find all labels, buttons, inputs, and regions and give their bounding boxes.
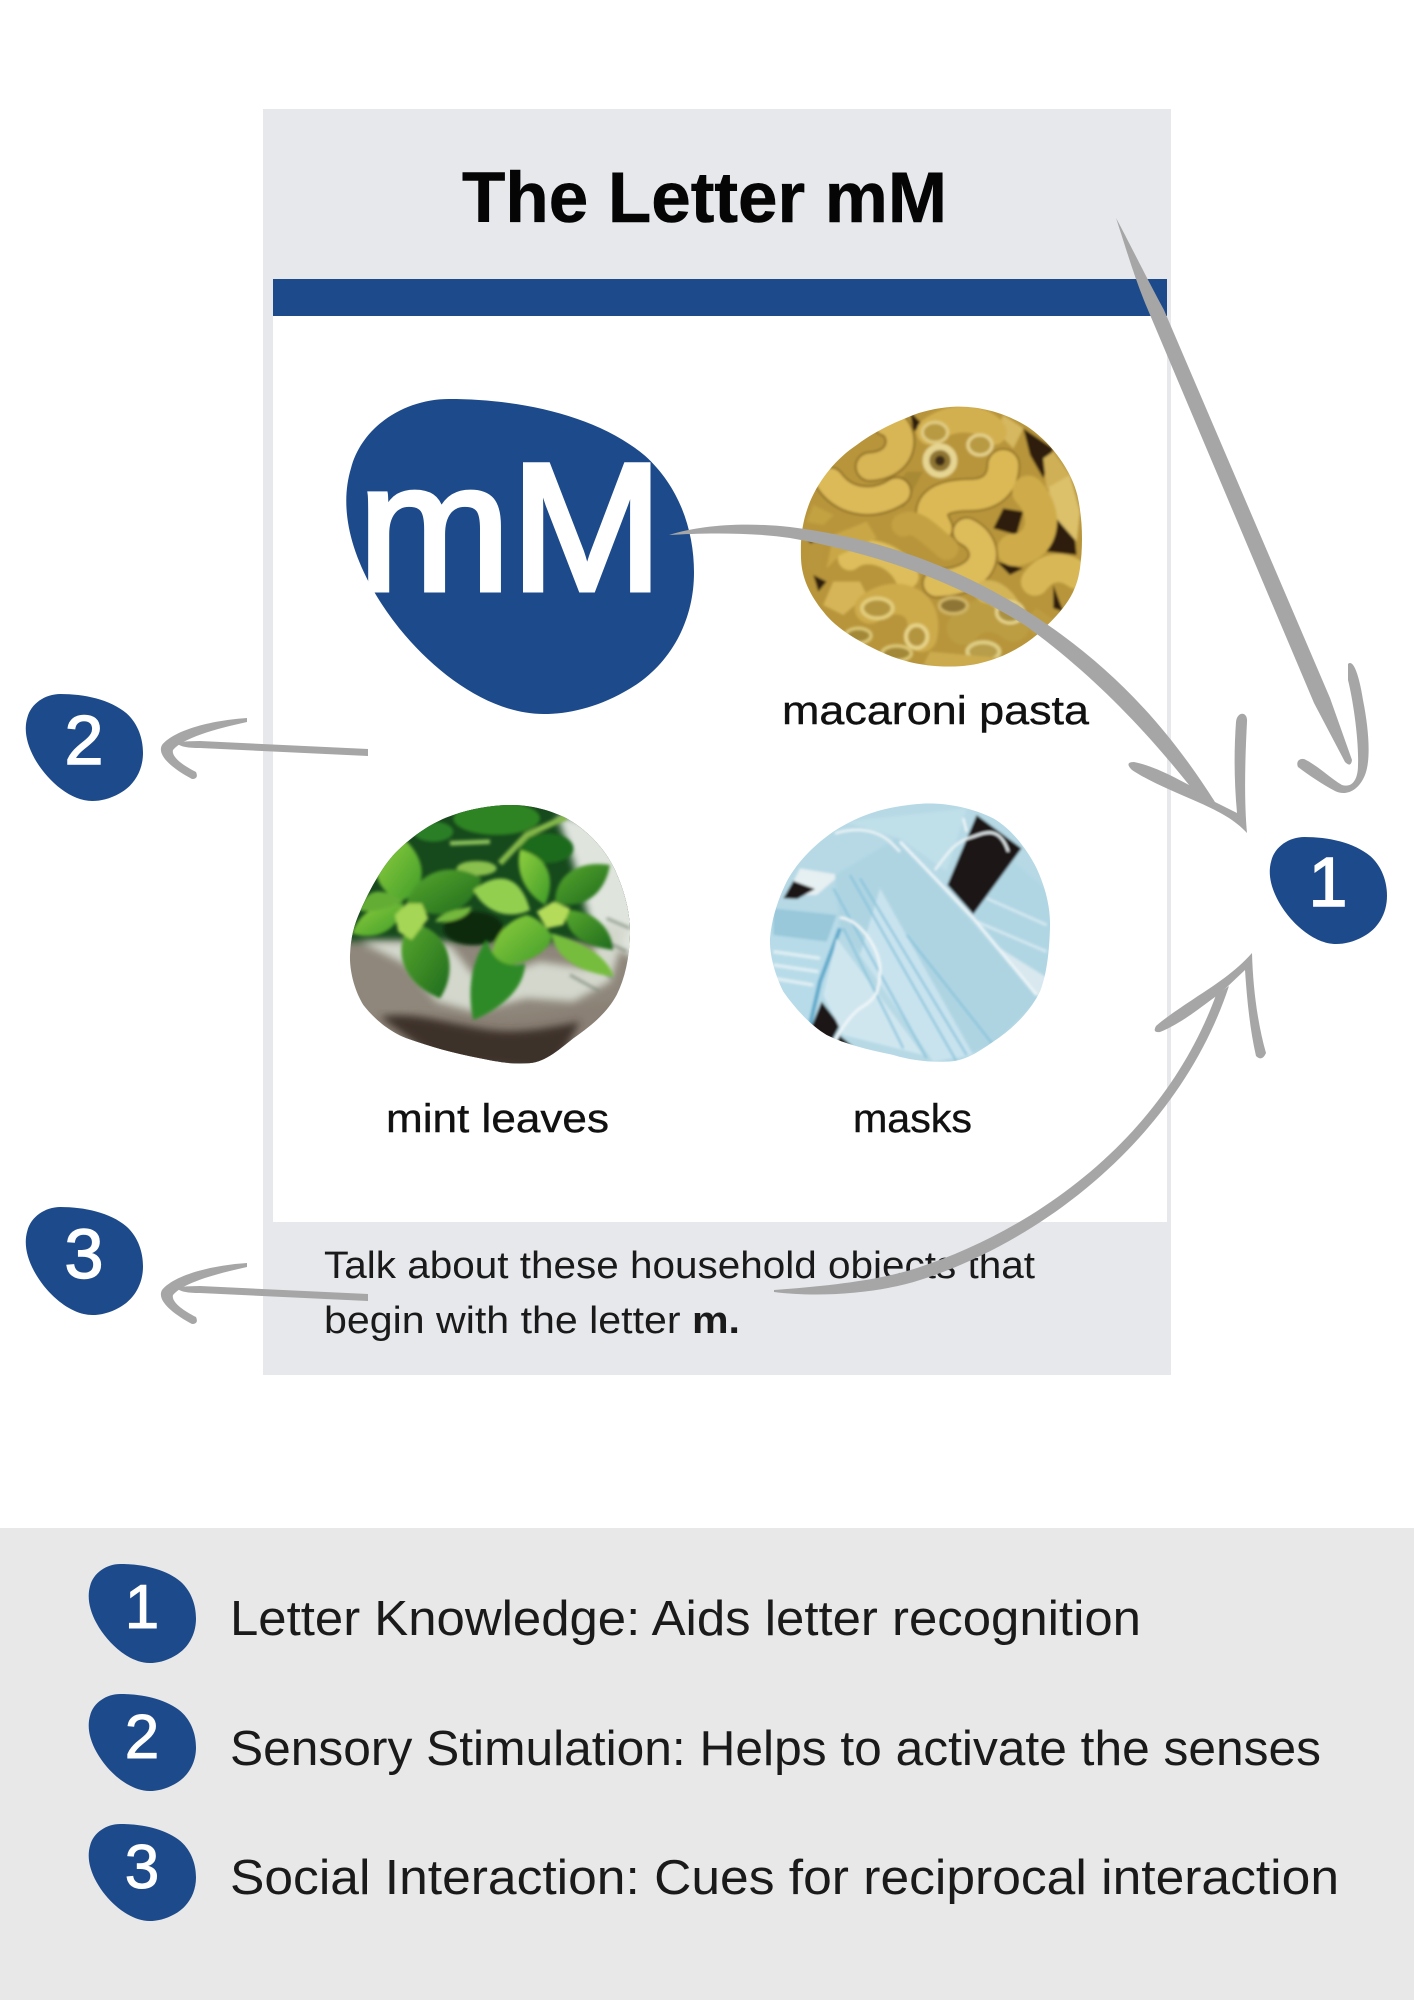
arrow: title to badge 1: [1116, 218, 1369, 793]
badge 2: 2: [65, 701, 103, 779]
legend item 3: [89, 1824, 1339, 1921]
legend item 2: 2: [125, 1703, 159, 1772]
photo: macaroni pasta: [800, 406, 1082, 667]
badge 2: [26, 694, 143, 801]
photo: mint leaves: [350, 805, 630, 1064]
header bar: [273, 279, 1167, 316]
photo: masks: [770, 804, 1050, 1062]
legend item 1: Letter Knowledge: Aids letter recognition: [230, 1592, 1141, 1646]
text block: card caption: Talk about these household objects that: [324, 1245, 1035, 1287]
legend item 1: 1: [125, 1573, 159, 1642]
icon: mM letter blob: mM: [358, 425, 663, 629]
panel: legend: [0, 1528, 1414, 2000]
icon: mM letter blob: [346, 399, 694, 714]
legend item 1: [89, 1564, 1141, 1663]
text block: card caption: [324, 1245, 1035, 1342]
panel: letter card: [263, 109, 1171, 1375]
badge 3: 3: [65, 1215, 103, 1293]
legend item 2: [89, 1694, 1321, 1791]
arrow: caption to badge 1: [774, 953, 1266, 1295]
badge 3: [26, 1207, 143, 1315]
arrow: to badge 2: [161, 718, 368, 779]
legend item 3: 3: [125, 1833, 159, 1902]
legend item 2: Sensory Stimulation: Helps to activate the senses: [230, 1722, 1321, 1776]
arrow: mM blob to badge 1: [669, 525, 1247, 833]
legend item 3: Social Interaction: Cues for reciprocal interaction: [230, 1851, 1339, 1905]
badge 1: [1270, 837, 1387, 944]
label: masks: masks: [853, 1097, 972, 1141]
label: macaroni pasta: macaroni pasta: [782, 689, 1090, 733]
arrow: to badge 3: [161, 1263, 368, 1324]
text block: card caption: begin with the letter m.: [324, 1300, 740, 1342]
label: mint leaves: mint leaves: [386, 1097, 609, 1141]
title: The Letter mM: [462, 159, 947, 238]
badge 1: 1: [1309, 843, 1347, 921]
